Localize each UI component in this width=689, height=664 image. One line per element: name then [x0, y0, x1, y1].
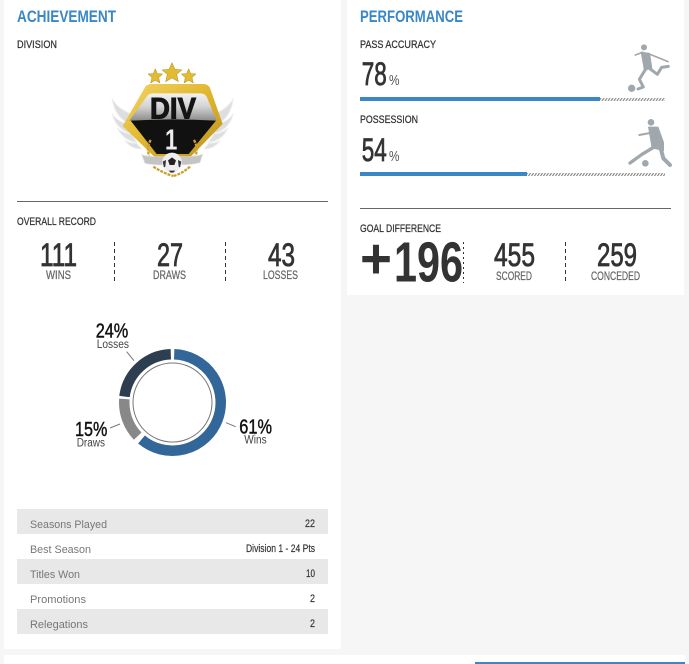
- icon: kicking player: [628, 44, 668, 92]
- row: seasons played: Seasons Played: [30, 519, 107, 531]
- stat: draws: 27: [157, 237, 183, 273]
- label: losses share: [96, 321, 129, 351]
- row: promotions: Promotions: [30, 594, 86, 606]
- row: relegations: [30, 618, 315, 631]
- stat: conceded: [591, 237, 640, 283]
- label: draws share: Draws: [77, 438, 105, 450]
- label: possession: POSSESSION: [360, 114, 418, 126]
- stat: wins: [40, 237, 77, 282]
- value: possession: %: [389, 148, 400, 165]
- stat: losses: 43: [268, 237, 295, 273]
- ribbon: [142, 154, 203, 165]
- row: titles won: 10: [306, 568, 315, 580]
- segment: losses: [124, 354, 171, 396]
- row: promotions: [30, 593, 315, 606]
- label: goal difference: GOAL DIFFERENCE: [360, 223, 441, 235]
- label: draws share: [75, 419, 107, 450]
- badge text DIV: DIV: [150, 92, 196, 125]
- panel: performance: [347, 0, 684, 295]
- row: relegations: Relegations: [30, 619, 88, 631]
- row: promotions: 2: [310, 593, 315, 605]
- label: pass accuracy: PASS ACCURACY: [360, 39, 437, 51]
- stats table: [17, 509, 328, 634]
- label: draws share: 15%: [75, 419, 107, 441]
- heading: achievement: ACHIEVEMENT: [17, 7, 116, 26]
- label: losses share: 24%: [96, 321, 128, 343]
- stat: losses: LOSSES: [263, 268, 298, 282]
- value: pass accuracy: 78: [362, 56, 387, 92]
- badge number: 1: [165, 124, 177, 156]
- label: division: DIVISION: [17, 39, 57, 51]
- stat: draws: [153, 237, 186, 282]
- progress bar: possession: [360, 172, 665, 176]
- stat: scored: [494, 237, 535, 283]
- row: seasons played: 22: [305, 518, 315, 530]
- icon: division 1 badge: [112, 63, 233, 176]
- label: wins share: 61%: [239, 416, 272, 438]
- panel: achievement: [4, 0, 341, 649]
- stat: draws: DRAWS: [153, 268, 186, 282]
- silver panel: [129, 93, 217, 121]
- row: relegations: 2: [310, 618, 315, 630]
- ball: [162, 153, 182, 173]
- progress bar: pass accuracy: [360, 97, 665, 101]
- value: possession: 54: [362, 132, 387, 168]
- laurels: [148, 140, 197, 176]
- row: best season: Division 1 - 24 Pts: [246, 543, 315, 555]
- value: goal difference: [360, 227, 463, 294]
- value: pass accuracy: %: [389, 72, 400, 89]
- segment: wins: [142, 354, 221, 451]
- row: titles won: [30, 568, 315, 581]
- label: losses share: Losses: [97, 339, 129, 351]
- stars: [148, 63, 196, 83]
- row: best season: Best Season: [30, 544, 91, 556]
- stat: scored: 455: [494, 237, 535, 273]
- label: wins share: Wins: [244, 434, 267, 446]
- stat: conceded: CONCEDED: [591, 269, 640, 283]
- stat: losses: [263, 237, 298, 282]
- segment: draws: [124, 399, 138, 436]
- label: overall record: OVERALL RECORD: [17, 216, 96, 228]
- stat: conceded: 259: [597, 237, 637, 273]
- row: best season: [30, 543, 315, 556]
- wings: [112, 98, 233, 149]
- panel: next section: [4, 655, 685, 664]
- donut chart: [75, 321, 272, 451]
- heading: performance: PERFORMANCE: [360, 7, 463, 26]
- stat: wins: 111: [40, 237, 77, 273]
- stat: scored: SCORED: [496, 269, 532, 283]
- stat: wins: WINS: [46, 268, 71, 282]
- value: goal difference: +: [360, 227, 392, 291]
- gold shield: [123, 84, 223, 157]
- label: wins share: [239, 416, 272, 446]
- black panel: [131, 119, 216, 154]
- row: titles won: Titles Won: [30, 569, 80, 581]
- row: seasons played: [30, 518, 315, 531]
- icon: dribbling player: [630, 119, 670, 167]
- value: goal difference: 196: [394, 230, 463, 294]
